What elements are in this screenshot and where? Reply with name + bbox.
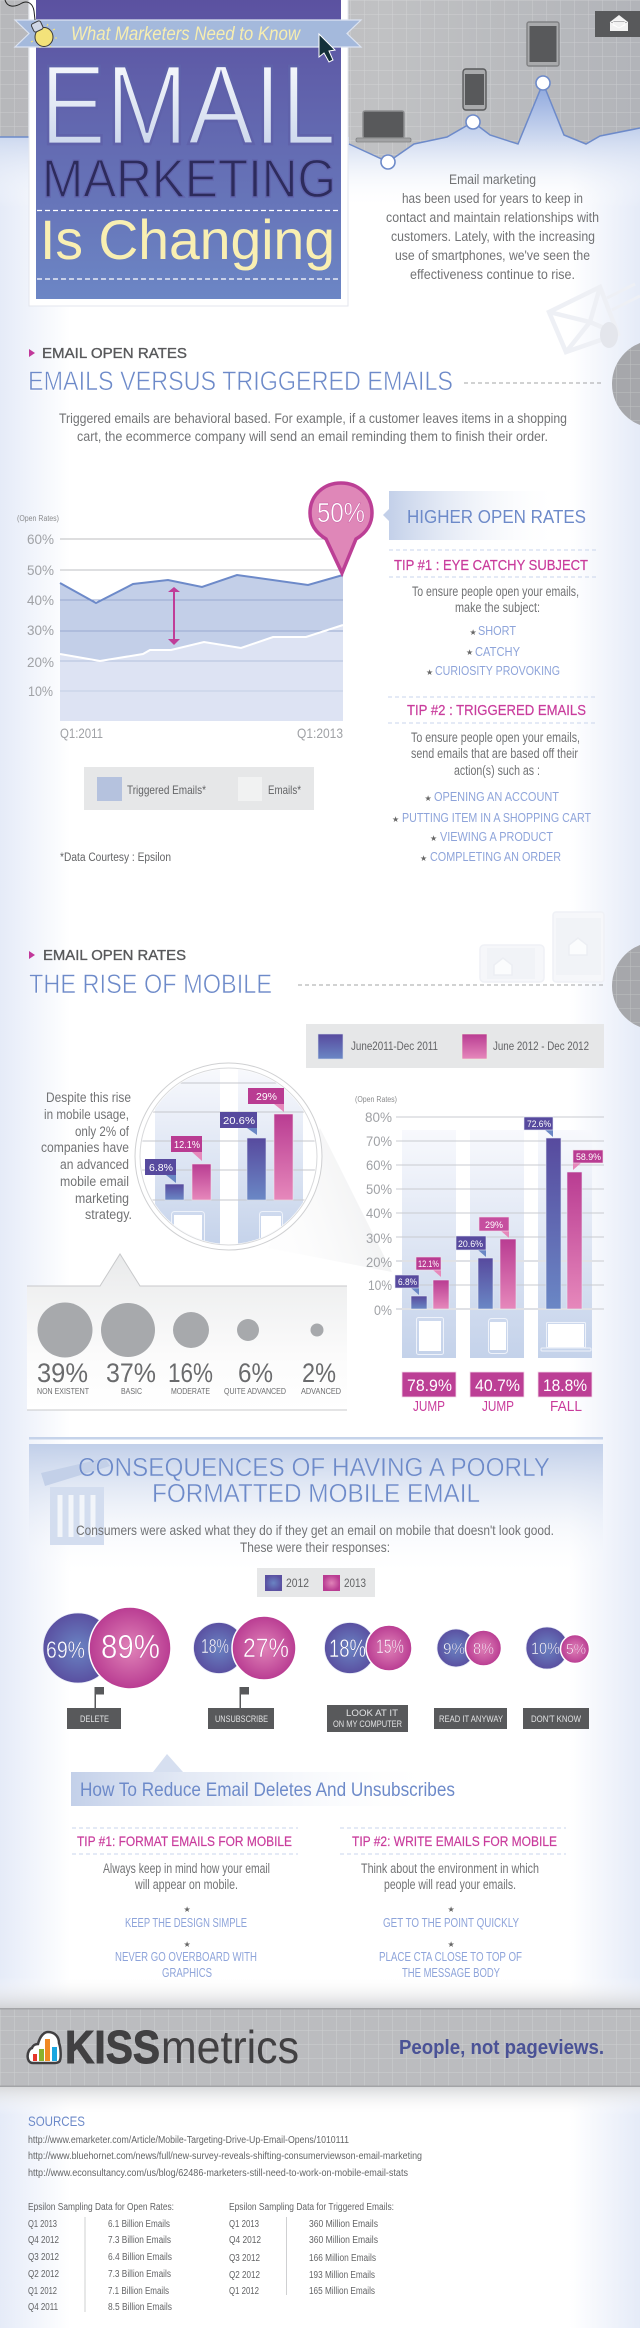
tip: format emails for mobile: TIP #1: FORMAT EMAILS FOR MOBILE (77, 1833, 292, 1849)
bubbles: unsubscribe: 18% (201, 1636, 229, 1658)
sources: http://www.emarketer.com/Article/Mobile-Targeting-Drive-Up-Email-Opens/1010111 (28, 2135, 349, 2146)
panel: consequences heading: CONSEQUENCES OF HAVING A POORLY (78, 1452, 550, 1482)
panel: consequences heading: Consumers were asked what they do if they get an email on mobile that doesn't look good. (76, 1522, 554, 1538)
table: open rates sampling: 6.4 Billion Emails (108, 2252, 172, 2263)
legend: date ranges (306, 1024, 604, 1068)
legend: date ranges: June 2012 - Dec 2012 (493, 1039, 589, 1053)
bar value tags: 72.6% (527, 1119, 551, 1130)
text: despite this rise: marketing (75, 1191, 129, 1206)
tip: write emails for mobile: TIP #2: WRITE EMAILS FOR MOBILE (352, 1833, 557, 1849)
tip 1: CATCHY (475, 645, 521, 659)
icons: tablet, phone, laptop (416, 1318, 591, 1354)
tip 2: send emails that are based off their (411, 746, 578, 761)
panel: consequences heading: These were their responses: (240, 1539, 390, 1555)
bar value tags: 20.6% (458, 1239, 484, 1250)
bubbles: unsubscribe (194, 1616, 296, 1680)
tip 2: OPENING AN ACCOUNT (434, 790, 559, 804)
intro text: effectiveness continue to rise. (410, 267, 575, 282)
result boxes: FALL (550, 1398, 582, 1415)
header: gray grid backdrop with device line chart (0, 0, 640, 208)
bar value tags: 6.8% (398, 1277, 417, 1288)
tip 2: ★ (430, 834, 437, 843)
area chart: open rates: 50% (27, 562, 54, 578)
bar value tags: 12.1% (418, 1259, 439, 1270)
title: Is Changing: Is Changing (40, 208, 335, 271)
value tags: 12.1% (174, 1139, 200, 1151)
category labels: MODERATE (171, 1386, 210, 1396)
chart legend: Emails* (268, 783, 301, 797)
text: despite this rise: an advanced (60, 1157, 129, 1172)
tip: write emails for mobile: Think about the environment in which (361, 1861, 539, 1876)
area chart: open rates: 40% (27, 592, 54, 608)
tip 1: make the subject: (455, 600, 540, 615)
tip 1: To ensure people open your emails, (412, 584, 579, 599)
sources: http://www.bluehornet.com/news/full/new-survey-reveals-shifting-consumerviewson-email-marketing (28, 2151, 422, 2162)
section 1 intro: Triggered emails are behavioral based. For example, if a customer leaves items in a shopping (59, 410, 567, 426)
section 1 heading: EMAILS VERSUS TRIGGERED EMAILS (28, 366, 453, 396)
title panel (29, 0, 348, 306)
section 2 heading: EMAIL OPEN RATES (43, 948, 186, 964)
tip 1: ★ (426, 668, 433, 677)
how to reduce deletes heading (71, 1754, 566, 1854)
tip: format emails for mobile: KEEP THE DESIGN SIMPLE (125, 1916, 247, 1930)
tip: format emails for mobile: ★ (184, 1905, 191, 1914)
table: open rates sampling (28, 2202, 174, 2313)
section 2 heading (29, 948, 604, 999)
logo: KISSmetrics: metrics (161, 2021, 299, 2073)
legend: years: 2012 (286, 1576, 309, 1590)
chart legend: Triggered Emails* (127, 783, 206, 797)
area chart: open rates: (Open Rates) (17, 514, 59, 523)
chart legend (84, 767, 314, 810)
response labels: UNSUBSCRIBE (215, 1714, 268, 1725)
tip: format emails for mobile: Always keep in mind how your email (103, 1861, 270, 1876)
response labels: DON'T KNOW (531, 1714, 581, 1725)
bubbles: read it anyway: 8% (473, 1641, 494, 1658)
value tags: 29% (256, 1091, 277, 1103)
bar chart: open rates by device: 60% (366, 1157, 392, 1173)
line chart markers (381, 76, 550, 169)
table: triggered emails sampling: 166 Million Emails (309, 2253, 376, 2264)
result boxes (402, 1372, 592, 1415)
percentages: 39% (37, 1358, 88, 1388)
callout pin: 50%: 50% (317, 497, 365, 528)
tip: format emails for mobile: GRAPHICS (162, 1966, 212, 1980)
bubbles: don't know: 10% (531, 1639, 560, 1658)
legend: years: 2013 (344, 1576, 366, 1590)
response labels: LOOK AT IT (346, 1708, 398, 1719)
bubbles: read it anyway: 9% (443, 1641, 465, 1658)
bar chart: open rates by device: 40% (366, 1205, 392, 1221)
area chart: open rates (17, 514, 343, 741)
text: despite this rise: only 2% of (75, 1124, 129, 1139)
tip: write emails for mobile: ★ (448, 1940, 455, 1949)
decorative gray circle 1 (612, 340, 640, 428)
tagline: People, not pageviews. (399, 2037, 604, 2059)
bubbles: look at it on my computer: 15% (376, 1637, 404, 1658)
panel: consequences heading: FORMATTED MOBILE EMAIL (152, 1478, 480, 1508)
table: open rates sampling: 8.5 Billion Emails (108, 2302, 172, 2313)
bubbles: look at it on my computer: 18% (329, 1635, 366, 1663)
text: despite this rise: strategy. (85, 1207, 132, 1222)
tip 1: ★ (466, 648, 473, 657)
tip 2: action(s) such as : (454, 763, 540, 778)
section 1 heading (28, 346, 604, 396)
tip 2: TIP #2 : TRIGGERED EMAILS (407, 703, 586, 719)
bubbles: read it anyway (437, 1629, 502, 1667)
bar chart: open rates by device (355, 1095, 604, 1358)
table: triggered emails sampling: Q1 2013 (229, 2219, 259, 2230)
table: open rates sampling: Q4 2012 (28, 2235, 59, 2246)
legend: date ranges: June2011-Dec 2011 (351, 1039, 438, 1053)
bar chart: open rates by device: 80% (365, 1109, 392, 1125)
bar value tags: 58.9% (576, 1152, 602, 1163)
sources: SOURCES (28, 2113, 85, 2129)
bubbles: delete (43, 1607, 171, 1689)
magnifier cone (268, 1128, 392, 1272)
section 1 intro (59, 410, 567, 444)
bar chart: open rates by device: 0% (374, 1302, 392, 1318)
percentages: 37% (106, 1358, 156, 1388)
ribbon: what marketers need to know (15, 20, 361, 47)
bubbles: delete: 69% (46, 1637, 85, 1664)
table: open rates sampling: 7.1 Billion Emails (108, 2286, 169, 2297)
bar chart: open rates by device: (Open Rates) (355, 1095, 397, 1104)
table: open rates sampling: 7.3 Billion Emails (108, 2269, 171, 2280)
panel: consequences heading (29, 1437, 603, 1577)
response labels: DELETE (80, 1714, 109, 1725)
table: open rates sampling: Q1 2012 (28, 2286, 57, 2297)
table: triggered emails sampling: 360 Million Emails (309, 2219, 378, 2230)
response labels: ON MY COMPUTER (333, 1719, 402, 1730)
icon: tablet (527, 22, 559, 66)
table: open rates sampling: Q1 2013 (28, 2219, 57, 2230)
tip: write emails for mobile: GET TO THE POINT QUICKLY (383, 1916, 519, 1930)
legend: years (257, 1568, 375, 1597)
intro text: Email marketing (449, 172, 536, 187)
area chart: open rates: Q1:2013 (297, 725, 343, 741)
text: despite this rise: in mobile usage, (44, 1107, 129, 1122)
percentages (37, 1358, 336, 1388)
tip: format emails for mobile: ★ (184, 1940, 191, 1949)
tip: write emails for mobile: ★ (448, 1905, 455, 1914)
logo: KISSmetrics: KISS (65, 2021, 160, 2073)
how to reduce deletes heading: How To Reduce Email Deletes And Unsubscribes (80, 1779, 455, 1801)
table: triggered emails sampling: 193 Million Emails (309, 2270, 375, 2281)
tip: write emails for mobile: PLACE CTA CLOSE TO TOP OF (379, 1950, 522, 1964)
response labels (67, 1705, 589, 1732)
result boxes: JUMP (482, 1398, 514, 1415)
intro text: customers. Lately, with the increasing (391, 229, 595, 244)
bubbles: don't know (526, 1627, 590, 1669)
section 1 intro: cart, the ecommerce company will send an email reminding them to finish their order. (77, 428, 548, 444)
bar chart: open rates by device: 20% (366, 1254, 392, 1270)
data courtesy note: *Data Courtesy : Epsilon (60, 852, 171, 864)
tip: write emails for mobile: THE MESSAGE BODY (402, 1966, 500, 1980)
flags (94, 1687, 249, 1708)
area chart: open rates: 10% (28, 683, 53, 699)
table: open rates sampling: Q2 2012 (28, 2269, 59, 2280)
percentages: 2% (302, 1358, 336, 1388)
tag: envelope icon (595, 11, 640, 37)
area chart: open rates: 20% (27, 654, 54, 670)
table: open rates sampling: Q4 2011 (28, 2302, 58, 2313)
intro text: use of smartphones, we've seen the (395, 248, 590, 263)
footer band (0, 1977, 640, 2115)
bubbles: look at it on my computer (324, 1622, 412, 1674)
icon: mouse cursor (319, 34, 335, 62)
tip 2: PUTTING ITEM IN A SHOPPING CART (402, 811, 591, 825)
table: triggered emails sampling: Q1 2012 (229, 2286, 259, 2297)
tip 2: ★ (424, 794, 432, 803)
result boxes: 18.8% (543, 1376, 587, 1395)
tip: format emails for mobile (77, 1833, 292, 1980)
table: triggered emails sampling: 360 Million Emails (309, 2235, 378, 2246)
result boxes: 78.9% (407, 1376, 452, 1395)
intro text (386, 172, 599, 282)
text: despite this rise: companies have (41, 1140, 129, 1155)
response labels: READ IT ANYWAY (439, 1714, 504, 1725)
value tags: 6.8% (149, 1162, 173, 1174)
table: open rates sampling: Epsilon Sampling Data for Open Rates: (28, 2202, 174, 2213)
tip: write emails for mobile (352, 1833, 557, 1980)
icon: ghost flying envelope (549, 284, 640, 352)
table: triggered emails sampling: Epsilon Sampling Data for Triggered Emails: (229, 2202, 394, 2213)
table: open rates sampling: 6.1 Billion Emails (108, 2219, 170, 2230)
text: despite this rise (41, 1090, 132, 1222)
bubbles: unsubscribe: 27% (243, 1633, 289, 1663)
area chart: open rates: 30% (27, 622, 54, 638)
category labels: NON EXISTENT (37, 1386, 89, 1396)
category labels: ADVANCED (301, 1386, 341, 1396)
tip 2: COMPLETING AN ORDER (430, 850, 561, 864)
text: despite this rise: Despite this rise (46, 1090, 131, 1105)
panel: higher open rates (383, 491, 597, 864)
value tags: 20.6% (223, 1115, 255, 1127)
callout pin: 50% (310, 483, 372, 573)
bubbles: don't know: 5% (566, 1641, 586, 1658)
intro text: contact and maintain relationships with (386, 210, 599, 225)
bubbles: delete: 89% (101, 1628, 160, 1665)
tip: write emails for mobile: people will read your emails. (384, 1877, 516, 1892)
tip: format emails for mobile: NEVER GO OVERBOARD WITH (115, 1950, 257, 1964)
area chart: open rates: Q1:2011 (60, 725, 103, 741)
tip 1: ★ (470, 628, 477, 637)
category labels: QUITE ADVANCED (224, 1386, 286, 1396)
bar value tags: 29% (485, 1220, 504, 1231)
table: triggered emails sampling: Q3 2012 (229, 2253, 260, 2264)
tip 1 (394, 558, 588, 678)
tip 2 (392, 703, 591, 864)
panel: mobile strategy maturity (27, 1254, 347, 1410)
bar chart: open rates by device: 10% (368, 1277, 392, 1293)
tip: format emails for mobile: will appear on mobile. (134, 1877, 238, 1892)
tip 1: CURIOSITY PROVOKING (435, 664, 560, 678)
table: triggered emails sampling (229, 2202, 394, 2297)
bar chart: open rates by device: 30% (366, 1230, 392, 1246)
value tags (145, 1088, 284, 1183)
decorative gray circle 2 (612, 942, 640, 1030)
logo: KISSmetrics (28, 2021, 299, 2073)
bars (411, 1138, 582, 1309)
magnifier: chart detail (135, 1063, 322, 1256)
ribbon: what marketers need to know: What Marketers Need to Know (71, 24, 301, 45)
title: MARKETING: MARKETING (42, 149, 336, 209)
icon: laptop (356, 111, 411, 142)
section 1 heading: EMAIL OPEN RATES (42, 346, 187, 362)
icon: light bulb (5, 0, 57, 48)
table: open rates sampling: 7.3 Billion Emails (108, 2235, 171, 2246)
double arrow: gap between rates (168, 587, 180, 645)
icon: trash can (41, 1458, 110, 1545)
bar chart: open rates by device: 70% (366, 1133, 392, 1149)
tip 1: SHORT (478, 624, 516, 638)
sources (28, 2113, 422, 2179)
bar chart: open rates by device: 50% (366, 1181, 392, 1197)
category labels (37, 1386, 341, 1396)
text: despite this rise: mobile email (60, 1174, 129, 1189)
sources: http://www.econsultancy.com/us/blog/62486-marketers-still-need-to-work-on-mobile-email-stats (28, 2168, 408, 2179)
tip 2: ★ (420, 854, 427, 863)
ghost mobile devices (480, 912, 604, 982)
category labels: BASIC (121, 1386, 142, 1396)
bar value tags (395, 1117, 603, 1295)
table: triggered emails sampling: Q2 2012 (229, 2270, 260, 2281)
table: triggered emails sampling: 165 Million Emails (309, 2286, 375, 2297)
title: EMAIL: EMAIL (40, 42, 336, 168)
result boxes: 40.7% (475, 1376, 520, 1395)
result boxes: JUMP (413, 1398, 445, 1415)
bubble sizes (38, 1302, 324, 1358)
area chart: open rates: 60% (27, 531, 54, 547)
intro text: has been used for years to keep in (402, 191, 583, 206)
tip 1: TIP #1 : EYE CATCHY SUBJECT (394, 558, 588, 574)
tip 2: To ensure people open your emails, (411, 730, 580, 745)
panel: higher open rates: HIGHER OPEN RATES (407, 506, 586, 527)
table: open rates sampling: Q3 2012 (28, 2252, 59, 2263)
table: triggered emails sampling: Q4 2012 (229, 2235, 261, 2246)
section 2 heading: THE RISE OF MOBILE (29, 969, 272, 999)
percentages: 16% (168, 1358, 213, 1388)
tip 2: VIEWING A PRODUCT (440, 830, 553, 844)
tip 2: ★ (392, 815, 399, 824)
percentages: 6% (238, 1358, 273, 1388)
icon: phone (463, 69, 486, 110)
